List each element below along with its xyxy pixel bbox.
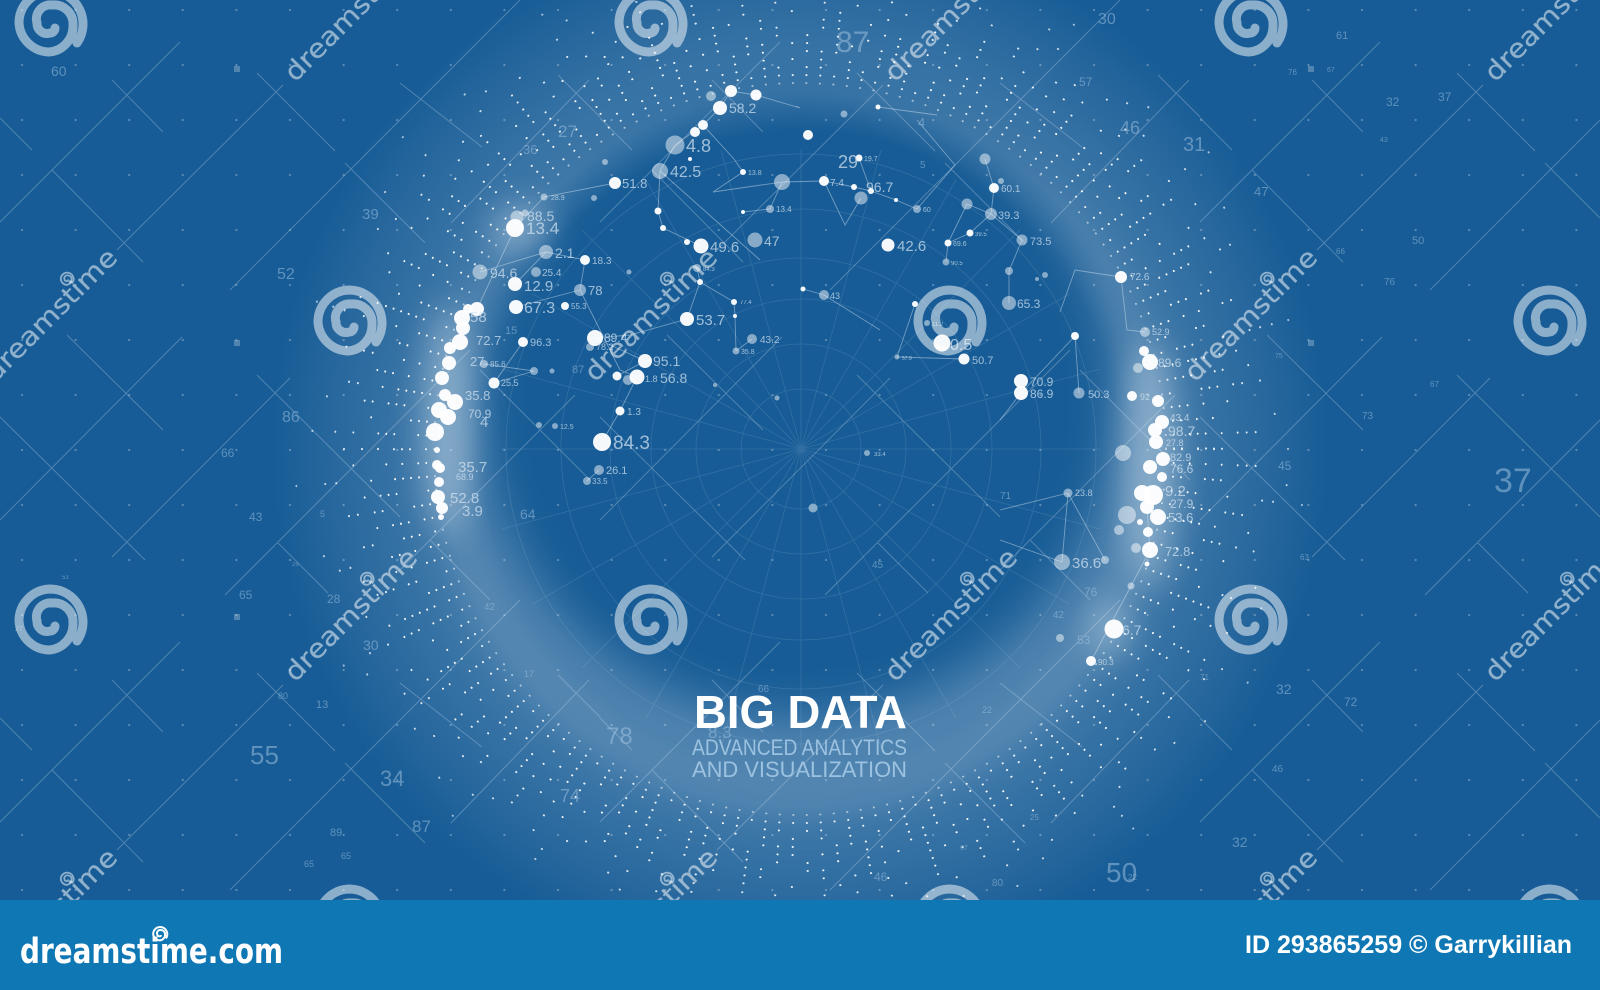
- node value labels: 68.9: [456, 472, 474, 482]
- node value labels: 47: [764, 233, 780, 249]
- node value labels: 6.7: [1122, 622, 1142, 638]
- node value labels: 27.9: [1170, 497, 1194, 511]
- background scattered numbers: 32: [1386, 95, 1400, 109]
- network connection lines: [477, 91, 1150, 661]
- radial dot rays: [295, 0, 1305, 954]
- background scattered numbers: 71: [1200, 673, 1209, 682]
- node value labels: 13.8: [748, 170, 762, 177]
- node value labels: 57.9: [902, 356, 912, 362]
- node value labels: 53.7: [696, 312, 725, 329]
- node value labels: 89.4: [604, 331, 628, 345]
- node value labels: 96.3: [530, 337, 551, 349]
- node value labels: 52.8: [450, 490, 479, 507]
- background scattered numbers: 25: [292, 562, 299, 568]
- background scattered numbers: 66: [1336, 247, 1345, 256]
- background scattered numbers: 46: [874, 870, 888, 884]
- background scattered numbers: 86: [282, 409, 300, 426]
- node value labels: 23.8: [1075, 488, 1093, 498]
- background scattered numbers: 53: [62, 575, 69, 581]
- background scattered numbers: 66: [758, 684, 770, 695]
- background scattered numbers: 76: [1384, 277, 1396, 288]
- node value labels: 84.3: [703, 267, 715, 273]
- background scattered numbers: 28: [327, 592, 341, 606]
- node value labels: 60.1: [1001, 184, 1021, 195]
- node value labels: 65.3: [1017, 297, 1041, 311]
- background scattered numbers: 4: [918, 115, 925, 130]
- footer bar: [0, 900, 1600, 990]
- data nodes: bright white: [488, 85, 1137, 666]
- node value labels: 13.4: [776, 205, 792, 214]
- node value labels: 70.9: [468, 407, 492, 421]
- node value labels: 43.4: [1170, 413, 1190, 424]
- background scattered numbers: 78: [606, 723, 633, 750]
- background scattered numbers: 30: [1098, 11, 1116, 28]
- background scattered numbers: 42: [484, 602, 496, 613]
- node value labels: 39.3: [998, 210, 1019, 222]
- watermark dreamstime text: dreamstime: [1179, 243, 1324, 388]
- background scattered numbers: 63: [1300, 553, 1309, 562]
- background scattered numbers: 46: [1272, 764, 1284, 775]
- right data cluster: [1134, 346, 1170, 566]
- watermark dreamstime text: dreamstime: [279, 543, 424, 688]
- background scattered numbers: 22: [982, 705, 992, 715]
- node value labels: 90.5: [951, 261, 963, 267]
- node value labels: 76.6: [1170, 462, 1194, 476]
- node value labels: 3.9: [462, 503, 483, 520]
- node value labels: 25.5: [501, 378, 519, 388]
- subtitle line 1: ADVANCED ANALYTICS: [692, 735, 907, 760]
- background scattered numbers: 47: [1254, 184, 1268, 199]
- background scattered numbers: 65: [304, 859, 314, 869]
- background scattered numbers: 32: [1232, 834, 1248, 850]
- node value labels: 70.9: [1030, 375, 1054, 389]
- node value labels: 82.9: [1170, 452, 1191, 464]
- background scattered numbers: 80: [278, 691, 288, 701]
- footer logo spiral: [153, 927, 167, 940]
- node value labels: 58: [470, 309, 487, 326]
- background scattered numbers: 32: [1276, 681, 1292, 697]
- node value labels: 85.6: [490, 360, 506, 369]
- background scattered numbers: 72: [1344, 695, 1358, 709]
- background scattered numbers: 76: [1288, 68, 1297, 77]
- node value labels: 4: [480, 414, 488, 431]
- background scattered numbers: 60: [51, 63, 67, 79]
- node value labels: 1.8: [645, 374, 658, 384]
- background scattered numbers: 31: [1183, 134, 1205, 156]
- node value labels: 43: [830, 291, 840, 301]
- node value labels: 35.8: [741, 349, 755, 356]
- node value labels: 1.3: [627, 407, 641, 418]
- data nodes: grey translucent: [472, 91, 1150, 642]
- background scattered numbers: 5: [320, 509, 325, 519]
- node value labels: 95.1: [653, 353, 680, 369]
- background scattered numbers: 66: [221, 446, 235, 460]
- node value labels: 84.3: [613, 433, 650, 454]
- node value labels: 94.6: [490, 265, 517, 281]
- watermark dreamstime text: dreamstime: [579, 243, 724, 388]
- background scattered numbers: 65: [239, 588, 253, 602]
- background scattered numbers: 22: [1128, 873, 1137, 882]
- background scattered numbers: 87: [572, 364, 584, 376]
- background scattered numbers: 36: [523, 142, 537, 157]
- node value labels: 4.8: [686, 136, 711, 156]
- node value labels: 9.2: [1165, 483, 1186, 500]
- node value labels: 50.3: [1088, 389, 1109, 401]
- background scattered numbers: 37: [1438, 90, 1452, 104]
- node value labels: 53.6: [1168, 510, 1193, 525]
- background scattered numbers: 50: [1412, 235, 1424, 247]
- background scattered numbers: 27: [558, 122, 577, 141]
- central polar grid: [501, 149, 1101, 749]
- node value labels: 25.4: [542, 268, 562, 279]
- background scattered numbers: 39: [362, 206, 379, 223]
- node value labels: 11.2: [932, 322, 944, 328]
- node value labels: 39.5: [975, 232, 987, 238]
- node value labels: 78.2: [596, 342, 614, 352]
- background scattered numbers: 80: [992, 878, 1004, 889]
- node value labels: 28.9: [551, 195, 565, 202]
- background scattered numbers: 67: [1327, 67, 1335, 74]
- node value labels: 33.4: [874, 452, 886, 458]
- background scattered numbers: 37: [1494, 462, 1532, 500]
- background scattered numbers: 75: [1275, 353, 1283, 360]
- background scattered numbers: 61: [1336, 30, 1348, 42]
- left data cluster: [426, 302, 484, 520]
- background scattered numbers: 13: [316, 699, 328, 711]
- background scattered numbers: 64: [520, 506, 536, 522]
- node value labels: 77.4: [740, 300, 752, 306]
- node value labels: 29: [838, 152, 858, 172]
- node value labels: 49.6: [710, 239, 739, 256]
- node value labels: 86.9: [1030, 387, 1054, 401]
- node value labels: 60: [923, 207, 931, 214]
- node value labels: 69.6: [953, 241, 967, 248]
- background scattered numbers: 45: [872, 560, 884, 571]
- watermark dreamstime text: dreamstime: [579, 843, 724, 988]
- node value labels: 51.8: [622, 176, 647, 191]
- soft glow behind dense data clusters: [422, 205, 1178, 660]
- background scattered numbers: 55: [250, 740, 279, 770]
- node value labels: 78: [588, 283, 602, 298]
- node value labels: 26.1: [606, 465, 627, 477]
- node value labels: 42.5: [670, 164, 701, 181]
- node value labels: 96.7: [866, 179, 893, 195]
- background scattered numbers: 67: [960, 845, 968, 852]
- node value labels: 27.8: [1166, 438, 1184, 448]
- node value labels: 72.6: [1130, 272, 1150, 283]
- background scattered numbers: 89: [330, 827, 342, 839]
- background scattered numbers: 17: [524, 669, 534, 679]
- node value labels: 18.3: [592, 256, 612, 267]
- background scattered numbers: 73: [1362, 411, 1374, 422]
- background scattered numbers: 76: [1084, 585, 1098, 599]
- background scattered numbers: 50: [1106, 857, 1137, 888]
- background scattered numbers: 25: [1030, 813, 1039, 822]
- node value labels: 56.8: [660, 370, 687, 386]
- node value labels: 92: [1140, 392, 1150, 402]
- node value labels: 50.7: [972, 355, 993, 367]
- background scattered numbers: 52: [277, 266, 295, 283]
- watermark dreamstime text: dreamstime: [1179, 843, 1324, 988]
- background scattered numbers: 87: [836, 26, 869, 59]
- background scattered numbers: 34: [380, 766, 404, 791]
- node value labels: 72.8: [1165, 544, 1190, 559]
- node value labels: 0.5: [950, 337, 972, 354]
- background scattered numbers: 71: [1000, 491, 1012, 502]
- node value labels: 72.7: [476, 333, 501, 348]
- background scattered numbers: 67: [1430, 380, 1439, 389]
- subtitle line 2: AND VISUALIZATION: [692, 757, 907, 782]
- square markers: [234, 66, 1314, 620]
- node value labels: 88.5: [527, 208, 554, 224]
- background scattered numbers: 42: [1053, 610, 1065, 621]
- node value labels: 58.2: [729, 100, 756, 116]
- node value labels: 36.6: [1072, 555, 1101, 572]
- background scattered numbers: 5: [920, 160, 926, 171]
- background scattered numbers: 43: [1380, 137, 1388, 144]
- background scattered numbers: 57: [1079, 75, 1093, 89]
- background scattered numbers: 27: [15, 626, 23, 633]
- node value labels: 35.8: [465, 388, 490, 403]
- title: BIG DATA: BIG DATA: [694, 686, 907, 738]
- node value labels: 67.3: [524, 300, 555, 317]
- footer logo text: dreamstime.com: [20, 932, 283, 972]
- background scattered numbers: 8.3: [708, 723, 732, 742]
- node value labels: 42.6: [897, 238, 926, 255]
- node value labels: 98.7: [1168, 423, 1195, 439]
- background scattered numbers: 43: [249, 510, 263, 524]
- watermark dreamstime text: dreamstime: [879, 543, 1024, 688]
- node value labels: 52.9: [1152, 327, 1170, 337]
- node value labels: 73.5: [1030, 236, 1051, 248]
- glowing ring: [438, 92, 1162, 806]
- node value labels: 55.3: [571, 302, 587, 311]
- node value labels: 7.4: [830, 178, 844, 189]
- node value labels: 12.9: [524, 278, 553, 295]
- title block: [692, 686, 907, 782]
- node value labels: 33.5: [592, 477, 608, 486]
- footer image id and credit: ID 293865259 © Garrykillian: [1245, 931, 1572, 959]
- background scattered numbers: 30: [363, 637, 379, 653]
- node value labels: 2.1: [555, 245, 575, 261]
- background scattered numbers: 65: [341, 851, 351, 861]
- background scattered numbers: 53: [1077, 633, 1091, 647]
- background scattered numbers: 87: [412, 817, 431, 836]
- background scattered numbers: 45: [1278, 459, 1292, 473]
- background scattered numbers: 74: [560, 786, 580, 806]
- node value labels: 89.6: [1158, 356, 1182, 370]
- node value labels: 13.4: [526, 219, 559, 238]
- node value labels: [450, 100, 1195, 667]
- node value labels: 27: [470, 354, 484, 369]
- node value labels: 35.7: [458, 459, 487, 476]
- background scattered numbers: 46: [1120, 118, 1140, 138]
- node value labels: 43.2: [760, 335, 780, 346]
- node value labels: 90.3: [1098, 658, 1114, 667]
- node value labels: 12.5: [560, 424, 574, 431]
- node value labels: 19.7: [864, 156, 878, 163]
- background scattered numbers: 15: [505, 325, 517, 337]
